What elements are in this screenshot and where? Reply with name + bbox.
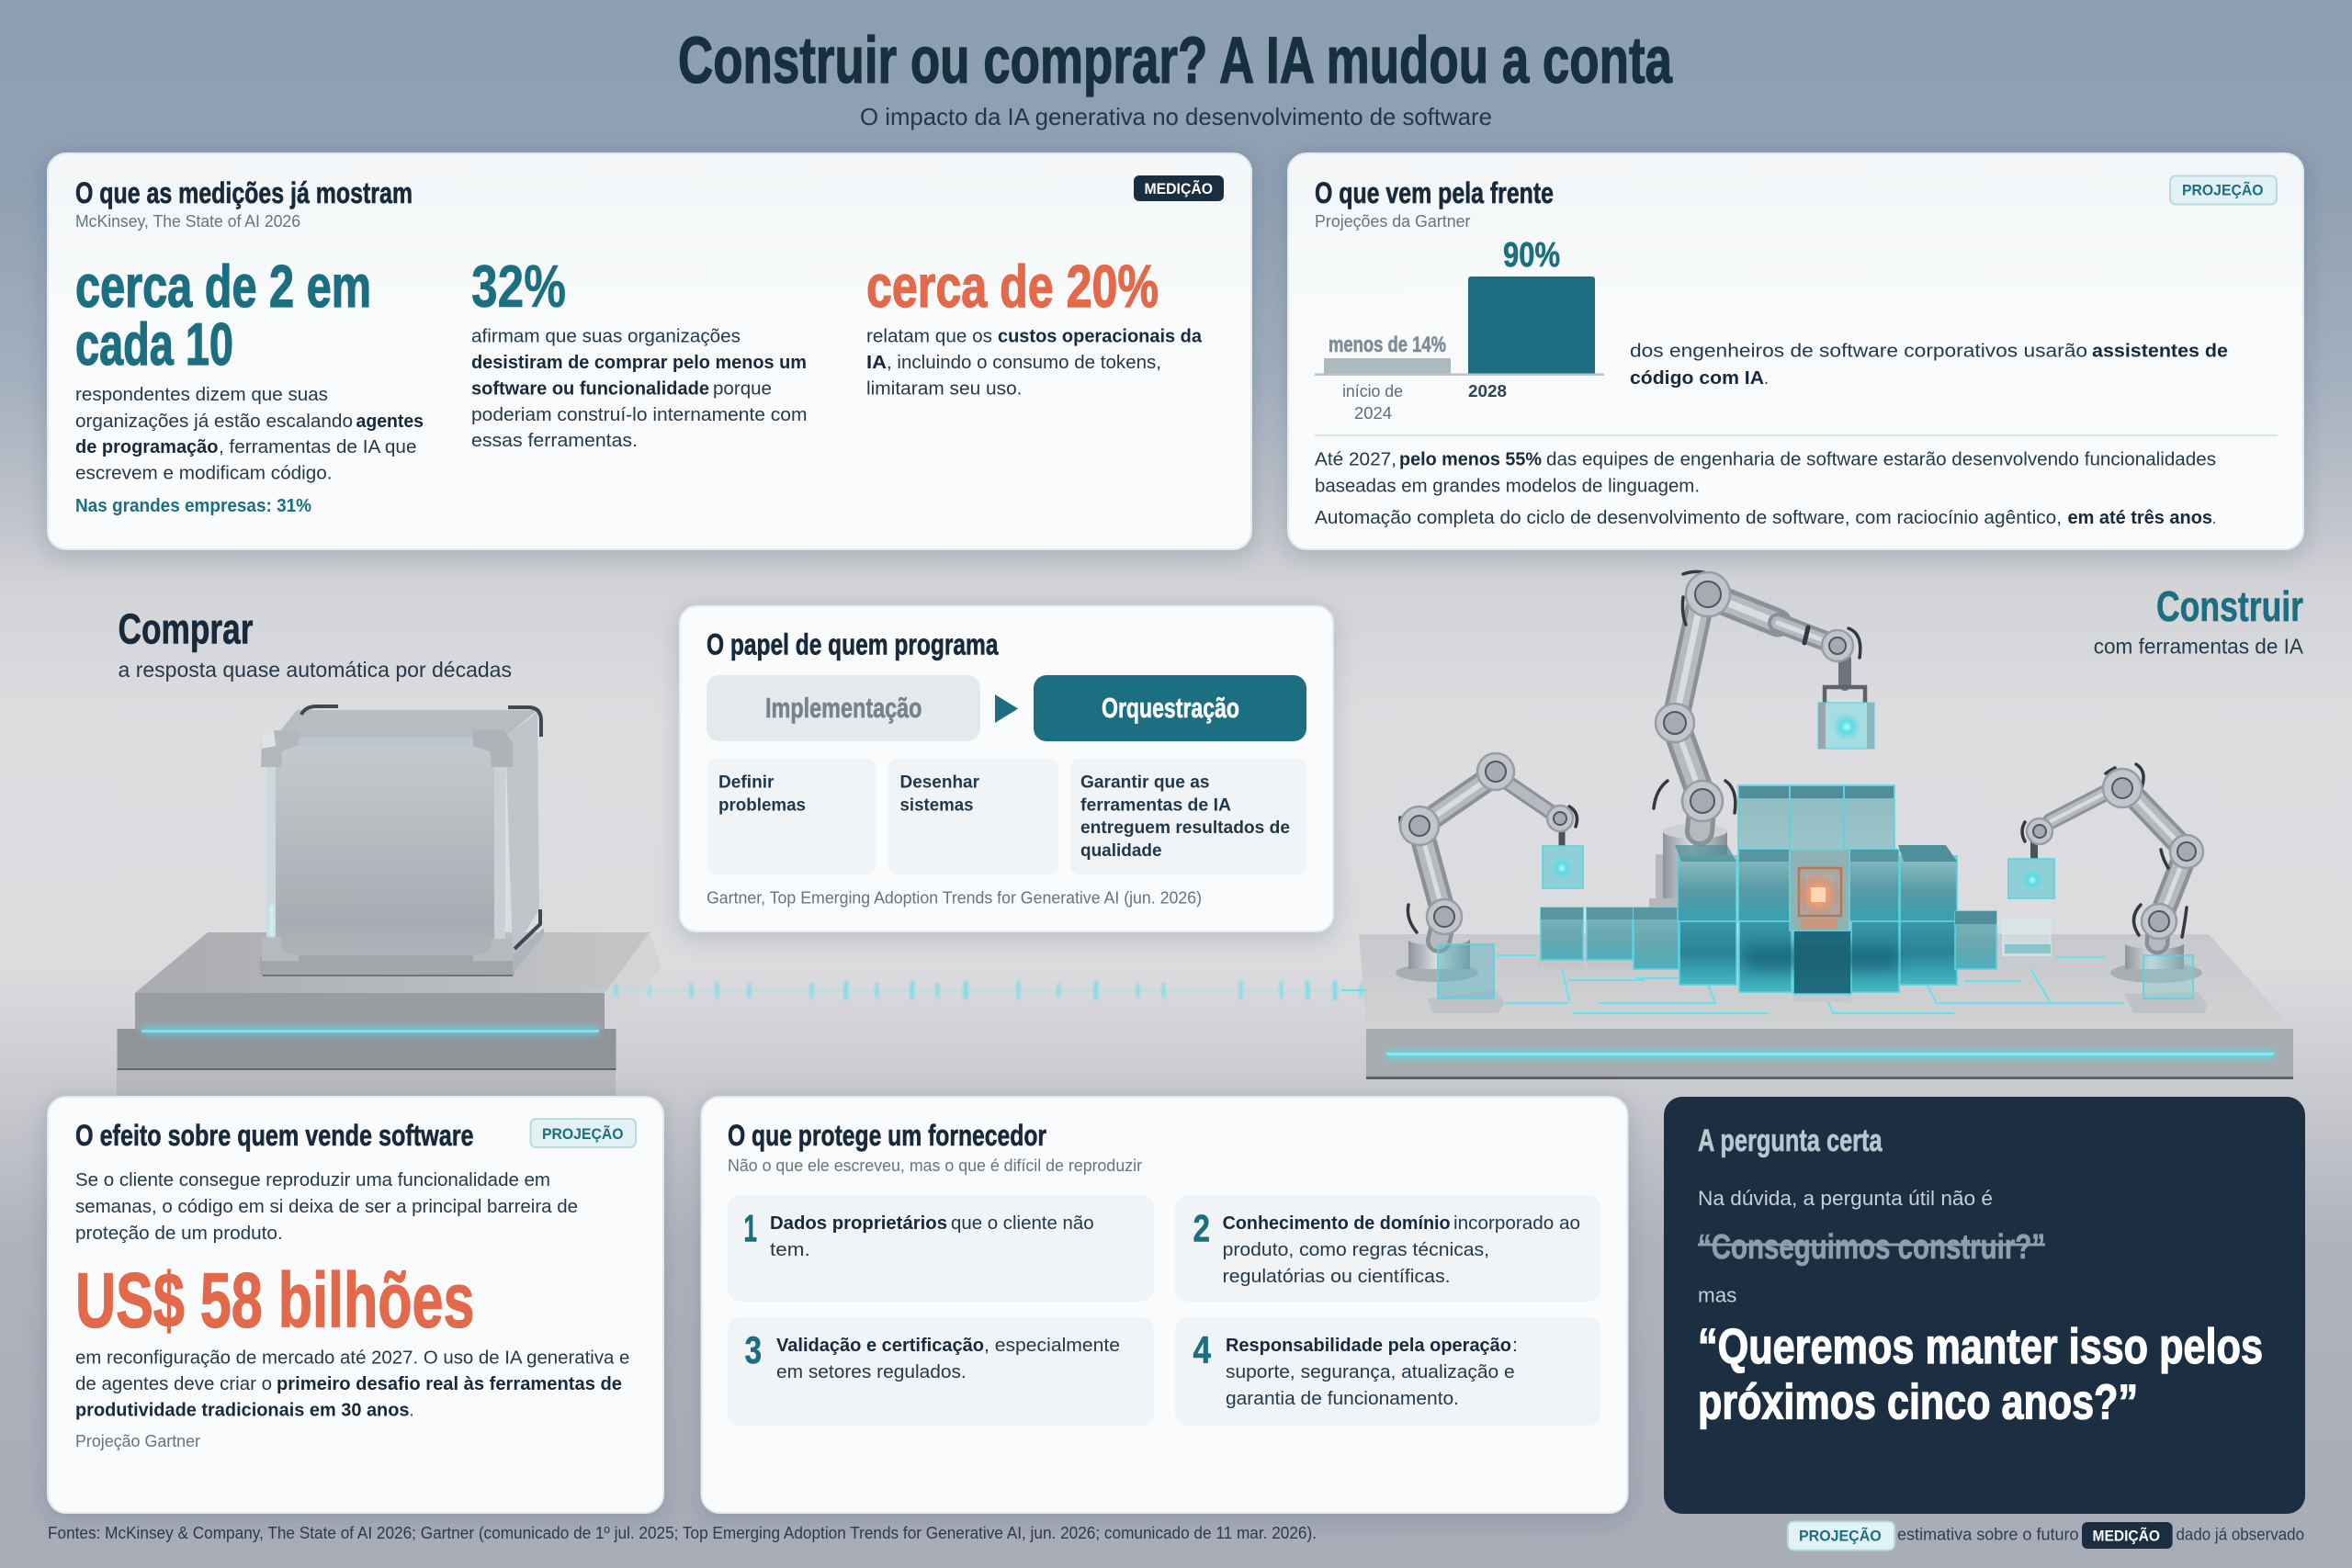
stat: cerca de 20%: custos operacionais da	[998, 325, 1203, 347]
panel: medições	[48, 153, 1251, 549]
box: implementação	[707, 675, 980, 741]
item: garantir resultados	[1070, 759, 1306, 874]
item 2: conhecimento de domínio	[1175, 1195, 1600, 1302]
stat: 32%: desistiram de comprar pelo menos um	[471, 352, 807, 373]
item: definir problemas	[707, 759, 876, 874]
arrow: implementação para orquestração	[995, 694, 1018, 723]
stat: 2 em cada 10: respondentes dizem que suas	[75, 384, 328, 405]
stat: cerca de 20%: IA	[866, 352, 887, 373]
item 3: validação e certificação: Validação e certificação	[776, 1335, 984, 1356]
heading: medições: O que as medições já mostram	[75, 176, 413, 209]
item 2: conhecimento de domínio: produto, como regras técnicas,	[1223, 1239, 1489, 1260]
stat: 2 em cada 10: cerca de 2 em	[75, 253, 371, 320]
stat: 32%: porque	[713, 378, 772, 399]
heading: comprar: a resposta quase automática por décadas	[118, 658, 512, 682]
top row	[1738, 785, 1894, 850]
heading: construir: Construir	[2156, 582, 2303, 630]
stat: 32%	[471, 253, 807, 451]
item 3: validação e certificação: 3	[745, 1328, 762, 1371]
stat: 2 em cada 10: Nas grandes empresas: 31%	[75, 495, 311, 516]
middle row	[1675, 845, 1957, 921]
text: conseguimos construir: “Conseguimos construir?”	[1698, 1228, 2045, 1267]
panel: o papel de quem programa	[680, 606, 1333, 931]
stat: cerca de 20%: relatam que os	[866, 325, 992, 347]
item 1: dados proprietários: que o cliente não	[951, 1213, 1094, 1234]
heading: construir	[2094, 582, 2304, 659]
text: assistentes de código: dos engenheiros de software corporativos usarão	[1630, 341, 2087, 362]
bar chart: assistentes de código: menos de 14%	[1329, 333, 1446, 357]
text: na dúvida: Na dúvida, a pergunta útil não é	[1698, 1187, 1993, 1210]
illustration: platform with robots and glass cubes	[1341, 571, 2293, 1079]
stat: 32%: essas ferramentas.	[471, 430, 638, 451]
source: Gartner adoption trends: Gartner, Top Emerging Adoption Trends for Generative AI (jun. 2026)	[707, 888, 1202, 908]
heading: o que vem pela frente: O que vem pela frente	[1315, 176, 1554, 209]
stat: US$ 58 bilhões: US$ 58 bilhões	[75, 1257, 474, 1343]
bar chart: assistentes de código: início de	[1342, 381, 1403, 400]
heading: efeito: O efeito sobre quem vende software	[75, 1119, 474, 1152]
stat: 2 em cada 10: de programação	[75, 436, 219, 457]
text: intro: Se o cliente consegue reproduzir uma funcionalidade em	[75, 1169, 550, 1190]
stat: 32%: 32%	[471, 253, 566, 320]
item: definir problemas: problemas	[718, 796, 806, 816]
arrow: stream of light particles	[588, 980, 1378, 1000]
panel: efeito sobre quem vende software	[48, 1097, 663, 1513]
icon: frosted box	[260, 706, 544, 976]
item 4: responsabilidade pela operação: garantia de funcionamento.	[1226, 1388, 1459, 1409]
text: intro	[75, 1169, 578, 1244]
badge: projeção	[2170, 176, 2277, 204]
source: McKinsey: McKinsey, The State of AI 2026	[75, 211, 300, 231]
platform	[1359, 934, 2293, 1079]
stat: 32%: software ou funcionalidade	[471, 378, 709, 399]
item 3: validação e certificação	[728, 1317, 1154, 1426]
item: garantir resultados: entreguem resultados de	[1080, 818, 1290, 838]
robot bases and pedestals	[1396, 824, 2207, 1013]
item 4: responsabilidade pela operação: 4	[1193, 1328, 1212, 1371]
text: projeções 2027: .	[2212, 507, 2216, 528]
heading: pergunta: A pergunta certa	[1698, 1123, 1883, 1158]
panel: o que protege um fornecedor	[702, 1097, 1628, 1513]
text: assistentes de código: assistentes de	[2092, 341, 2228, 362]
robot: left arm	[1400, 753, 1577, 941]
stat: cerca de 20%: cerca de 20%	[866, 253, 1159, 320]
item 3: validação e certificação: , especialmente	[984, 1335, 1120, 1356]
stat: 2 em cada 10: cada 10	[75, 310, 233, 378]
badge: projeção	[531, 1119, 636, 1147]
stat: cerca de 20%	[866, 253, 1203, 399]
stat: 32%: afirmam que suas organizações	[471, 325, 741, 347]
text: assistentes de código: código com IA	[1630, 367, 1764, 389]
stat: cerca de 20%: , incluindo o consumo de tokens,	[887, 352, 1161, 373]
item: desenhar sistemas: Desenhar	[900, 773, 980, 792]
legend: PROJEÇÃO	[1799, 1527, 1882, 1545]
badge: projeção: PROJEÇÃO	[542, 1124, 624, 1143]
heading: papel: O papel de quem programa	[707, 628, 999, 661]
badge: medição: MEDIÇÃO	[1145, 179, 1213, 197]
text: projeções 2027: baseadas em grandes modelos de linguagem.	[1315, 476, 1700, 497]
heading: construir: com ferramentas de IA	[2094, 635, 2304, 659]
box: orquestração	[1034, 675, 1306, 741]
box: orquestração: Orquestração	[1102, 692, 1239, 724]
text: detalhe: em reconfiguração de mercado até 2027. O uso de IA generativa e	[75, 1347, 629, 1369]
text: projeções 2027: das equipes de engenharia de software estarão desenvolvendo funcionalidades	[1546, 449, 2216, 470]
robot: center arm	[1654, 571, 1865, 831]
item 2: conhecimento de domínio: 2	[1193, 1206, 1210, 1249]
text: projeções 2027: Automação completa do ciclo de desenvolvimento de software, com raciocínio agêntico,	[1315, 507, 2062, 528]
item: garantir resultados: qualidade	[1080, 841, 1161, 861]
stat: 2 em cada 10: , ferramentas de IA que	[219, 436, 417, 457]
legend: dado já observado	[2176, 1525, 2304, 1543]
text: intro: semanas, o código em si deixa de ser a principal barreira de	[75, 1196, 578, 1217]
title: Construir ou comprar? A IA mudou a conta	[678, 25, 1672, 97]
item 4: responsabilidade pela operação: :	[1512, 1335, 1518, 1356]
item 2: conhecimento de domínio: incorporado ao	[1453, 1213, 1580, 1234]
box: implementação: Implementação	[765, 692, 922, 724]
text: assistentes de código: .	[1764, 367, 1769, 389]
text: projeções 2027: em até três anos	[2067, 507, 2212, 528]
held and front cubes	[1438, 703, 2193, 998]
text: detalhe: de agentes deve criar o	[75, 1373, 272, 1394]
item 1: dados proprietários	[728, 1195, 1154, 1302]
item 4: responsabilidade pela operação	[1175, 1317, 1600, 1426]
text: projeções 2027	[1315, 449, 2216, 528]
item: definir problemas: Definir	[718, 773, 775, 792]
subheading: Não o que ele escreveu, mas o que é difícil de reproduzir	[728, 1156, 1142, 1175]
panel: projeções	[1288, 153, 2303, 549]
text: detalhe	[75, 1347, 629, 1421]
source: projeção Gartner: Projeção Gartner	[75, 1431, 200, 1450]
subtitle: O impacto da IA generativa no desenvolvimento de software	[860, 103, 1492, 130]
quote: próximos cinco anos?”	[1698, 1375, 2138, 1430]
footer: sources: Fontes: McKinsey & Company, The State of AI 2026; Gartner (comunicado de 1º jul. 2025; Top Emerging Adoption Trends for Generative AI, jun. 2026; comunicado de 11 mar. 2026).	[48, 1523, 1317, 1542]
bar chart: assistentes de código: 2028	[1468, 381, 1507, 400]
legend: estimativa sobre o futuro	[1897, 1525, 2079, 1543]
item 2: conhecimento de domínio: Conhecimento de domínio	[1223, 1213, 1451, 1234]
legend	[1788, 1521, 2304, 1551]
bar chart: assistentes de código: 90%	[1503, 236, 1560, 275]
text: mas: mas	[1698, 1284, 1736, 1307]
bottom row	[1679, 911, 1996, 1002]
stat: 2 em cada 10: agentes	[356, 411, 424, 432]
item 1: dados proprietários: 1	[743, 1206, 757, 1249]
bar chart: assistentes de código	[1315, 236, 1604, 423]
heading: fornecedor: O que protege um fornecedor	[728, 1119, 1046, 1152]
badge: medição	[1134, 175, 1224, 201]
item: garantir resultados: Garantir que as	[1080, 773, 1209, 792]
illustration: concrete pedestal with frosted box	[117, 706, 662, 1100]
item 1: dados proprietários: tem.	[770, 1239, 810, 1260]
low row left	[1541, 908, 1679, 969]
bar chart: assistentes de código: 2024	[1354, 403, 1392, 423]
text: detalhe: .	[410, 1400, 413, 1421]
glowing core	[1790, 850, 1849, 931]
stat: 32%: poderiam construí-lo internamente com	[471, 404, 807, 425]
quote	[1698, 1319, 2263, 1430]
text: projeções 2027: pelo menos 55%	[1399, 449, 1542, 470]
heading: comprar	[118, 605, 512, 682]
text: detalhe: primeiro desafio real às ferramentas de	[277, 1373, 622, 1394]
text: detalhe: produtividade tradicionais em 30 anos	[75, 1400, 410, 1421]
panel: a pergunta certa	[1664, 1097, 2305, 1514]
heading: comprar: Comprar	[118, 605, 254, 653]
item 3: validação e certificação: em setores regulados.	[776, 1361, 967, 1382]
source: Gartner: Projeções da Gartner	[1315, 211, 1470, 231]
item 1: dados proprietários: Dados proprietários	[770, 1213, 947, 1234]
stat: 2 em cada 10	[75, 253, 424, 516]
item 4: responsabilidade pela operação: suporte, segurança, atualização e	[1226, 1361, 1515, 1382]
text: assistentes de código	[1630, 341, 2228, 389]
stat: cerca de 20%: limitaram seu uso.	[866, 378, 1022, 399]
item: desenhar sistemas: sistemas	[900, 796, 974, 816]
glass cubes	[1438, 703, 2193, 1002]
item 4: responsabilidade pela operação: Responsabilidade pela operação	[1226, 1335, 1511, 1356]
stat: 2 em cada 10: escrevem e modificam código.	[75, 463, 333, 483]
legend: MEDIÇÃO	[2093, 1527, 2160, 1545]
item: desenhar sistemas	[888, 759, 1058, 874]
robot: right arm	[2022, 764, 2203, 942]
text: intro: proteção de um produto.	[75, 1223, 283, 1244]
badge: projeção: PROJEÇÃO	[2182, 180, 2264, 198]
item 2: conhecimento de domínio: regulatórias ou científicas.	[1223, 1266, 1451, 1287]
text: projeções 2027: Até 2027,	[1315, 449, 1396, 470]
item: garantir resultados: ferramentas de IA	[1080, 796, 1231, 816]
circuit lines	[1341, 955, 2124, 1013]
stat: 2 em cada 10: organizações já estão escalando	[75, 411, 353, 432]
